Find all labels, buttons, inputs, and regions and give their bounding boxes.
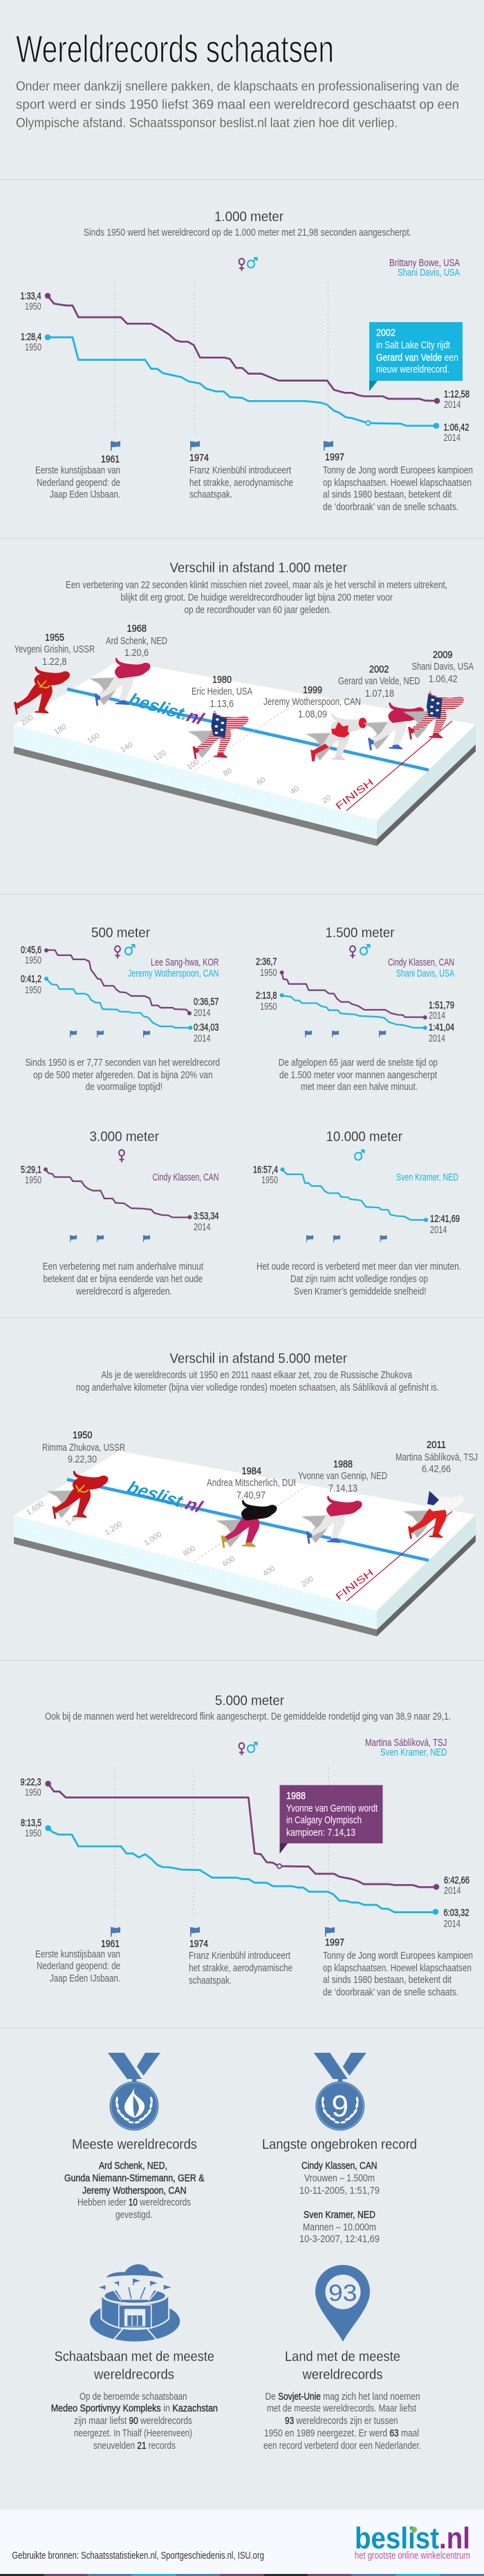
text block: neergezet. In Thialf (Heerenveen) [74, 2428, 192, 2439]
intro text [16, 79, 459, 131]
heading [285, 2349, 400, 2382]
sources: Gebruikte bronnen: Schaatsstatistieken.nl, Sportgeschiedenis.nl, ISU.org [12, 2550, 264, 2561]
values: 1:51,79 [429, 1000, 454, 1011]
event 1961: Jaap Eden IJsbaan. [50, 489, 120, 500]
text block: 10-11-2005, 1:51,79 [299, 2185, 380, 2197]
event 1997 [323, 452, 473, 513]
legend [389, 258, 460, 279]
line chart: mannen [48, 1828, 436, 1912]
line chart: mannen [48, 337, 436, 426]
values: 2014 [444, 1886, 460, 1897]
legend [388, 957, 454, 979]
text block: Vrouwen – 1.500m [304, 2173, 375, 2184]
values [21, 1777, 469, 1930]
event 1961: Nederland geopend: de [37, 1961, 120, 1972]
legend: Jeremy Wotherspoon, CAN [128, 968, 218, 979]
values: 1:41,04 [429, 1022, 454, 1033]
icon: medal with 9 [314, 2053, 366, 2130]
text block [26, 1057, 220, 1093]
values 1950: 1950 [25, 342, 41, 353]
heading: Land met de meeste [285, 2349, 400, 2365]
label 1984: Andrea Mitscherlich, DUI [207, 1478, 296, 1489]
values 2014 [444, 389, 469, 444]
line chart: vrouwen [48, 1784, 436, 1887]
values: 0:36,57 [194, 997, 218, 1008]
label 1984 [207, 1466, 296, 1501]
label 1950: 1950 [73, 1430, 93, 1441]
beslist logo on ice: beslist.nl [123, 1478, 207, 1516]
intro text: sport werd er sinds 1950 liefst 369 maal een wereldrecord geschaatst op een [16, 97, 459, 112]
callout: 2002: Gerard van Velde een [376, 352, 458, 364]
text block [299, 2161, 380, 2245]
callout: 2002 [369, 322, 463, 391]
values: 2014 [194, 1008, 210, 1019]
icon: flags [306, 1235, 387, 1242]
text block: blijkt dit erg groot. De huidige wereldrecordhouder ligt bijna 200 meter voor [120, 592, 393, 603]
label 1984: 7.40,97 [236, 1490, 266, 1501]
values: 0:41,2 [21, 974, 41, 985]
values: 6:42,66 [444, 1875, 469, 1886]
event 1974: Franz Krienbühl introduceert [189, 465, 291, 476]
text block: Hebben ieder 10 wereldrecords [77, 2197, 191, 2208]
icon: male [355, 1150, 364, 1160]
label 1968: 1968 [127, 623, 147, 634]
footer [0, 2510, 484, 2576]
icon: gender symbols [350, 945, 370, 958]
panel: 3.000 meter [21, 1129, 218, 1297]
label 2009: 1.06,42 [429, 674, 458, 685]
ice rink [14, 661, 476, 846]
beslist logo: beslist.nl [355, 2521, 470, 2555]
skater 1980 [187, 711, 249, 759]
heading: 3.000 meter [90, 1129, 159, 1145]
distance labels: 1.400 [64, 1510, 84, 1527]
text block [64, 2161, 205, 2221]
icon: hammer and sickle [37, 681, 50, 688]
icon: gender symbols [115, 945, 135, 958]
icon: gender symbols [239, 258, 257, 271]
legend: Sven Kramer, NED [396, 1172, 458, 1183]
event 1961 [35, 1939, 120, 1984]
data points [280, 970, 427, 1030]
icon: flags [111, 1927, 335, 1937]
text block: sneuvelden 21 records [93, 2441, 176, 2452]
label 2009 [412, 650, 474, 685]
icon: location pin [315, 2265, 370, 2342]
event 1974: Franz Krienbühl introduceert [189, 1950, 290, 1962]
heading: 500 meter [91, 925, 150, 941]
distance labels [19, 713, 333, 805]
text block [43, 1261, 203, 1297]
skater 1984 [216, 1500, 277, 1548]
icon: stadium [90, 2264, 180, 2342]
callout: 1988: in Calgary Olympisch [286, 1815, 362, 1826]
legend: Sven Kramer, NED [380, 1747, 447, 1758]
label 1984: 1984 [242, 1466, 261, 1477]
icon: gender symbols [239, 1742, 257, 1756]
text block: De Sovjet-Unie mag zich het land noemen [266, 2391, 420, 2403]
label 1950: Rimma Zhukova, USSR [42, 1442, 125, 1454]
icon: female [119, 1150, 124, 1163]
heading: 10.000 meter [326, 1129, 402, 1145]
distance labels: 1.000 [143, 1530, 163, 1548]
legend: Brittany Bowe, USA [389, 258, 460, 269]
values: 5:29,1 [21, 1165, 41, 1176]
callout: 2002: in Salt Lake City rijdt [376, 340, 450, 351]
heading: Verschil in afstand 1.000 meter [170, 560, 347, 576]
event 1961: Eerste kunstijsbaan van [35, 465, 120, 476]
legend: Cindy Klassen, CAN [388, 957, 454, 968]
values: 0:45,6 [21, 945, 41, 956]
line chart: vrouwen [48, 296, 436, 401]
label 2002: 2002 [369, 664, 389, 675]
label 1999 [263, 685, 361, 720]
text block: zijn maar liefst 90 wereldrecords [74, 2416, 192, 2427]
event 1974: 1974 [189, 1939, 208, 1950]
values: 1950 [25, 955, 41, 966]
icon: medal with flame [108, 2053, 160, 2130]
text block: met de meeste wereldrecords. Maar liefst [267, 2403, 416, 2414]
panel: 1.500 meter [256, 925, 454, 1093]
distance labels: 140 [119, 740, 134, 755]
label 1999: Jeremy Wotherspoon, CAN [263, 697, 361, 708]
values: 12:41,69 [430, 1214, 460, 1225]
label 2011: 2011 [427, 1440, 446, 1451]
distance labels: 60 [255, 775, 267, 787]
text block: Mannen – 10.000m [303, 2222, 376, 2233]
values: 1950 [260, 968, 277, 979]
text block: Gunda Niemann-Stirnemann, GER & [64, 2173, 205, 2184]
values 1950 [21, 291, 41, 353]
distance labels: 160 [86, 731, 101, 746]
label 1988: Yvonne van Gennip, NED [298, 1471, 387, 1482]
values: 16:57,4 [253, 1165, 278, 1176]
values: 2014 [194, 1033, 210, 1044]
values: 8:13,5 [21, 1818, 41, 1829]
label 1980: 1.13,6 [210, 699, 234, 710]
text block: 93 wereldrecords zijn er tussen [285, 2416, 398, 2427]
panel: 5.000 meter chart [21, 1693, 473, 1998]
heading: 1.000 meter [214, 209, 283, 225]
distance labels: 200 [300, 1574, 315, 1589]
text block [257, 1261, 461, 1297]
text block: Een verbetering met ruim anderhalve minuut [43, 1261, 203, 1272]
distance labels: 800 [182, 1544, 197, 1559]
callout: 1988 [279, 1785, 383, 1854]
values: 2014 [444, 1919, 460, 1930]
colour bar [0, 2574, 484, 2576]
subtitle: Sinds 1950 werd het wereldrecord op de 1.000 meter met 21,98 seconden aangescherpt. [84, 227, 411, 238]
line chart: mannen [46, 979, 190, 1028]
text block: Jeremy Wotherspoon, CAN [82, 2185, 187, 2197]
beslist logo on ice: beslist.nl [124, 690, 208, 728]
values: 2:36,7 [256, 957, 277, 968]
values [21, 1165, 218, 1233]
values: 2014 [429, 1010, 445, 1022]
text block [279, 1057, 438, 1093]
icon: flags [70, 1235, 150, 1242]
finish label: FINISH [333, 776, 375, 811]
label 2011 [395, 1440, 478, 1475]
data points [281, 1167, 428, 1222]
event 1961 [35, 454, 120, 500]
values: 1950 [25, 985, 41, 996]
distance labels: 1.600 [25, 1500, 46, 1517]
label 2002: Gerard van Velde, NED [338, 676, 420, 687]
text block: Op de beroemde schaatsbaan [80, 2391, 187, 2403]
values [256, 957, 454, 1044]
legend: Martina Sáblíková, TSJ [365, 1738, 447, 1749]
event 1961: 1961 [101, 454, 120, 465]
skater 1955 [14, 666, 70, 715]
line chart: mannen [282, 995, 425, 1028]
values 2014: 1:06,42 [444, 422, 469, 433]
label 2009: 2009 [433, 650, 452, 661]
text block: 10-3-2007, 12:41,69 [299, 2234, 380, 2245]
distance labels: 100 [185, 758, 201, 772]
values: 1950 [260, 1002, 277, 1013]
values: 3:53,34 [194, 1211, 218, 1222]
skater 1950 [47, 1471, 108, 1519]
legend [128, 957, 218, 979]
line chart [282, 1169, 426, 1220]
line chart [46, 1169, 190, 1217]
label 2002: 1.07,18 [365, 688, 394, 699]
distance labels [25, 1500, 315, 1589]
values [253, 1165, 460, 1236]
label 1999: 1999 [303, 685, 322, 696]
label 1955: Yevgeni Grishin, USSR [14, 644, 95, 655]
panel: land met de meeste wereldrecords [263, 2265, 421, 2452]
event 1997: de ‘doorbraak’ van de snelle schaats. [323, 502, 458, 513]
label 1980 [192, 675, 252, 710]
finish label: FINISH [333, 1567, 375, 1602]
panel: verschil in afstand 5.000 meter [14, 1351, 478, 1637]
distance labels: 180 [53, 722, 68, 737]
skater 1999 [306, 713, 366, 762]
values: 1950 [261, 1175, 278, 1186]
heading: Schaatsbaan met de meeste [55, 2349, 214, 2365]
text block: Als je de wereldrecords uit 1950 en 2011 naast elkaar zet, zou de Russische Zhukova [101, 1370, 413, 1381]
heading: 5.000 meter [215, 1693, 284, 1709]
data points [44, 948, 192, 1030]
event 1997 [323, 1937, 473, 1998]
event 1974 [189, 453, 293, 500]
values: 2014 [430, 1225, 447, 1236]
text block [263, 2391, 421, 2452]
label 1950: 9.22,30 [68, 1454, 97, 1465]
skater 1988 [301, 1496, 362, 1544]
text block: De afgelopen 65 jaar werd de snelste tijd op [279, 1057, 438, 1069]
text block: een record verbeterd door een Nederlander. [263, 2441, 421, 2452]
values: 6:03,32 [444, 1908, 469, 1919]
event 1974: het strakke, aerodynamische [189, 1963, 292, 1974]
event 1961: Nederland geopend: de [37, 478, 120, 489]
label 1968: Ard Schenk, NED [106, 636, 167, 647]
skater 2009 [403, 691, 464, 740]
icon: location pin: 93 [328, 2280, 357, 2306]
event 1997: 1997 [325, 1937, 344, 1948]
legend: Lee Sang-hwa, KOR [151, 957, 218, 968]
panel: verschil in afstand 1.000 meter [14, 560, 476, 846]
text block: gevestigd. [115, 2210, 152, 2221]
intro text: Olympische afstand. Schaatssponsor beslist.nl laat zien hoe dit verliep. [16, 115, 398, 131]
legend: Shani Davis, USA [398, 267, 460, 279]
heading [55, 2349, 214, 2382]
distance labels: 600 [221, 1554, 236, 1569]
text block: op de 500 meter afgereden. Dat is bijna 20% van [33, 1070, 213, 1081]
values 1950: 1:28,4 [21, 332, 41, 343]
event 1997: al sinds 1980 bestaan, betekent dit [323, 489, 452, 500]
text block: 1950 en 1989 neergezet. Er werd 63 maal [264, 2428, 419, 2439]
values: 1950 [25, 1175, 41, 1186]
values 2014: 1:12,58 [444, 389, 469, 400]
heading: 1.500 meter [325, 925, 395, 941]
heading: Langste ongebroken record [262, 2136, 417, 2152]
label 2002 [338, 664, 420, 699]
event 1961: Eerste kunstijsbaan van [35, 1949, 120, 1960]
values 1950: 1:33,4 [21, 291, 41, 302]
values: 2014 [194, 1222, 210, 1233]
label 1955: 1955 [45, 632, 64, 643]
distance labels: 1.200 [104, 1520, 124, 1537]
label 1988: 1988 [333, 1459, 353, 1470]
event 1974: 1974 [189, 453, 209, 464]
skater 2011 [403, 1491, 464, 1539]
values 2014: 2014 [444, 399, 460, 411]
text block: Cindy Klassen, CAN [301, 2161, 378, 2172]
legend: Cindy Klassen, CAN [152, 1172, 218, 1183]
event 1997: 1997 [325, 452, 344, 463]
callout: 2002: 2002 [376, 328, 395, 339]
label 2011: 6.42,66 [422, 1464, 451, 1475]
event 1961: 1961 [101, 1939, 120, 1950]
panel: meeste wereldrecords [64, 2053, 205, 2221]
label 1955 [14, 632, 95, 668]
values: 9:22,3 [21, 1777, 41, 1788]
values: 1950 [25, 1787, 41, 1798]
heading: Meeste wereldrecords [72, 2136, 197, 2152]
text block: Sven Kramer, NED [304, 2210, 375, 2221]
icon: flags [305, 1031, 386, 1037]
text block: Dat zijn ruim acht volledige rondjes op [290, 1274, 428, 1285]
event 1997: al sinds 1980 bestaan, betekent dit [323, 1975, 452, 1986]
icon: medal with 9: 9 [332, 2089, 348, 2123]
heading: wereldrecords [302, 2367, 383, 2382]
label 1980: Eric Heiden, USA [192, 686, 252, 697]
data points [44, 1167, 192, 1219]
event 1974: het strakke, aerodynamische [189, 478, 293, 489]
legend: Shani Davis, USA [396, 968, 454, 979]
panel: schaatsbaan met de meeste wereldrecords [51, 2264, 218, 2452]
label 1988 [298, 1459, 387, 1494]
icon: flags [70, 1031, 150, 1037]
label 1968: 1.20,6 [124, 648, 149, 659]
event 1974 [189, 1939, 292, 1986]
text block: Medeo Sportivnyy Kompleks in Kazachstan [51, 2403, 218, 2414]
text block: wereldrecord is afgereden. [75, 1286, 172, 1297]
panel: 500 meter [21, 925, 220, 1093]
label 1950 [42, 1430, 125, 1465]
text block [66, 580, 447, 616]
panel: 1.000 meter chart [21, 209, 473, 513]
distance labels: 120 [152, 749, 167, 763]
text block: Sven Kramer’s gemiddelde snelheid! [294, 1286, 426, 1297]
label 1980: 1980 [212, 675, 232, 686]
text block: Ard Schenk, NED, [99, 2161, 167, 2172]
event 1974: schaatspak. [189, 489, 232, 500]
text block [76, 1370, 439, 1393]
text block: met meer dan een halve minuut. [301, 1082, 418, 1093]
data points [45, 1780, 439, 1915]
callout: 2002: nieuw wereldrecord. [376, 364, 449, 375]
values: 2014 [429, 1033, 445, 1044]
legend [365, 1738, 447, 1758]
line chart: vrouwen [282, 972, 425, 1017]
distance labels: 20 [321, 793, 333, 805]
ice rink [14, 1451, 476, 1637]
event 1961: Jaap Eden IJsbaan. [50, 1973, 120, 1984]
heading: Verschil in afstand 5.000 meter [170, 1351, 347, 1366]
distance labels: 40 [289, 784, 301, 796]
label 1999: 1.08,09 [298, 709, 327, 720]
distance labels: 400 [261, 1564, 277, 1579]
callout: 1988: kampioen: 7.14,13 [286, 1827, 355, 1839]
panel: langste ongebroken record [262, 2053, 417, 2245]
title: Wereldrecords schaatsen [16, 27, 334, 70]
label 1955: 1.22,8 [42, 657, 66, 668]
text block: de voormalige toptijd! [86, 1082, 162, 1093]
values: 0:34,03 [194, 1022, 218, 1033]
panel: 10.000 meter [253, 1129, 461, 1297]
callout: 1988: 1988 [286, 1791, 306, 1802]
values 1950: 1950 [25, 301, 41, 312]
event 1997: de ‘doorbraak’ van de snelle schaats. [323, 1987, 458, 1998]
event 1974: schaatspak. [189, 1975, 232, 1986]
label 1968 [106, 623, 167, 659]
text block: de 1.500 meter voor mannen aangescherpt [279, 1070, 437, 1081]
values 2014: 2014 [444, 433, 460, 444]
skater 1968 [89, 658, 151, 706]
icon: flags [111, 441, 333, 451]
skater 2002 [363, 702, 424, 751]
values: 1950 [25, 1828, 41, 1839]
data points [45, 293, 440, 429]
values [21, 945, 218, 1044]
line chart: vrouwen [46, 950, 189, 1013]
distance labels: 80 [222, 767, 234, 778]
text block: op de recordhouder van 60 jaar geleden. [184, 605, 331, 616]
heading: wereldrecords [93, 2367, 174, 2382]
text block: betekent dat er bijna eenderde van het oude [43, 1274, 203, 1285]
text block: Sinds 1950 is er 7,77 seconden van het wereldrecord [26, 1057, 220, 1069]
label 1988: 7.14,13 [328, 1483, 357, 1494]
values: 2:13,8 [256, 990, 277, 1002]
distance labels: 200 [19, 713, 35, 728]
callout: 1988: Yvonne van Gennip wordt [286, 1803, 378, 1814]
text block [51, 2391, 218, 2452]
